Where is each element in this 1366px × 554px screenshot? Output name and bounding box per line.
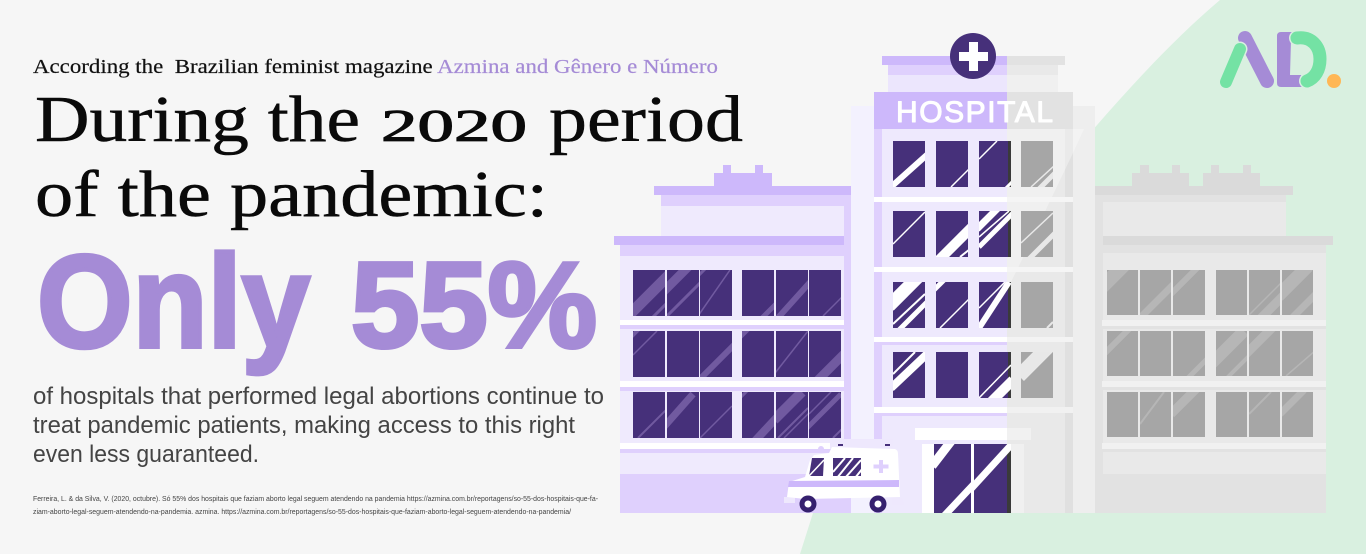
ambulance cross [874, 460, 888, 473]
green background shape [800, 0, 1366, 554]
floor bands [874, 197, 1073, 416]
icon: hospital cross [950, 33, 996, 79]
logo AD [1226, 32, 1341, 88]
entrance canopy [915, 428, 1031, 440]
wheels [800, 496, 816, 512]
title: During the [35, 83, 360, 156]
body text: of hospitals that performed legal abortions continue to [33, 383, 604, 410]
title: 2020 [381, 101, 527, 151]
central tower [851, 33, 1095, 516]
body text: even less guaranteed. [33, 441, 259, 468]
source citation: ziam-aborto-legal-seguem-atendendo-na-pandemia. azmina. https://azmina.com.br/reportagens/so-55-dos-hospitais-que-faziam-aborto-legal-seguem-atendendo-na-pandemia/ [33, 509, 571, 516]
source citation: Ferreira, L. & da Silva, V. (2020, octubre). Só 55% dos hospitais que faziam aborto legal seguem atendendo na pandemia https://azmina.com.br/reportagens/so-55-dos-hospitais-que-fa- [33, 496, 599, 503]
ambulance windows [809, 458, 824, 476]
right wing windows [1101, 260, 1316, 437]
upper roof [888, 65, 1007, 75]
diagonal light overlay [1007, 129, 1084, 290]
entrance door [922, 440, 1024, 516]
title [35, 83, 743, 231]
title: of the pandemic: [35, 158, 548, 231]
hospital illustration [614, 33, 1333, 516]
big statistic: 55% [351, 237, 597, 373]
intro line: According the Brazilian feminist magazine Azmina and Gênero e Número [33, 56, 718, 78]
central windows [889, 141, 1055, 402]
left wing windows [628, 264, 845, 442]
big statistic: Only [37, 228, 310, 375]
hospital sign: HOSPITAL [896, 96, 1053, 129]
body text: treat pandemic patients, making access to this right [33, 412, 575, 439]
ambulance [784, 439, 904, 512]
big statistic [37, 228, 597, 375]
right wing [1095, 165, 1333, 513]
left wing [614, 165, 852, 513]
source citation [33, 496, 599, 516]
body text [33, 383, 604, 468]
title: period [549, 83, 743, 156]
